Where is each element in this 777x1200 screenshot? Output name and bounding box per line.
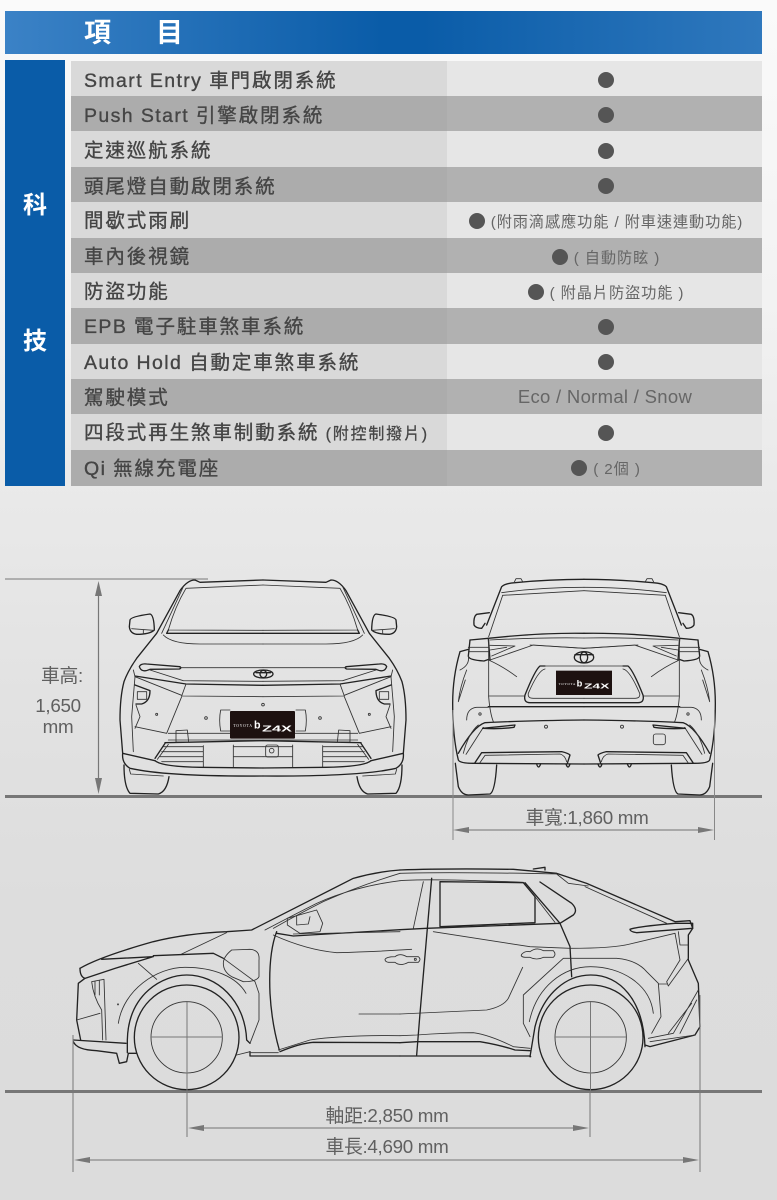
rear license plate: Z4X <box>584 682 611 691</box>
overall length dimension: 車長:4,690 mm <box>326 1136 448 1157</box>
wheelbase dimension: 軸距:2,850 mm <box>326 1105 448 1126</box>
feature row: wipers: (附雨滴感應功能 / 附車速連動功能) <box>491 214 743 231</box>
feature row: Push Start <box>71 96 762 131</box>
feature row: cruise control <box>71 131 762 167</box>
overall length dimension <box>73 995 700 1172</box>
feature row: wipers <box>71 202 762 238</box>
front license plate: TOYOTA <box>233 724 252 728</box>
feature row: drive modes: Eco / Normal / Snow <box>518 386 692 406</box>
front view of car <box>120 580 406 794</box>
sidebar character 技: 技 <box>23 328 47 355</box>
wheel centre crosshairs <box>151 1002 626 1092</box>
front license plate: b <box>254 720 261 732</box>
feature row: anti-theft <box>71 273 762 308</box>
rear fuel flap <box>653 734 665 745</box>
rear view of car <box>453 579 715 795</box>
feature row: rear-view mirror: 車內後視鏡 <box>84 246 191 268</box>
feature row: rear-view mirror <box>71 238 762 273</box>
height dimension: 1,650 <box>35 695 81 716</box>
front license plate <box>230 711 295 739</box>
feature row: Smart Entry: Smart Entry 車門啟閉系統 <box>84 70 338 92</box>
header title: 目 <box>156 18 183 48</box>
feature row: Smart Entry <box>71 61 762 96</box>
feature row: automatic lights: 頭尾燈自動啟閉系統 <box>84 176 277 198</box>
table header bar <box>5 11 762 54</box>
feature row: drive modes: 駕駛模式 <box>84 387 170 409</box>
feature row: drive modes <box>71 379 762 414</box>
feature row: EPB: EPB 電子駐車煞車系統 <box>84 316 305 338</box>
ground line: front and rear views <box>5 795 762 798</box>
ground line: side view <box>5 1090 762 1093</box>
side view of car <box>73 867 700 1090</box>
feature row: anti-theft: ( 附晶片防盜功能 ) <box>550 284 684 302</box>
feature row: wipers: 間歇式雨刷 <box>84 210 191 232</box>
wheelbase dimension <box>187 1092 590 1137</box>
width dimension: 車寬:1,860 mm <box>526 807 648 828</box>
feature row: rear-view mirror: ( 自動防眩 ) <box>574 250 660 266</box>
feature row: regenerative braking <box>71 414 614 450</box>
side view: front half <box>73 870 412 1090</box>
feature row: Push Start: Push Start 引擎啟閉系統 <box>84 105 324 127</box>
feature row: Auto Hold <box>71 344 762 379</box>
side view: rear half <box>385 867 700 1090</box>
feature row: Qi charger: Qi 無線充電座 <box>84 458 220 480</box>
rear license plate: b <box>577 679 583 689</box>
sidebar character 科: 科 <box>23 192 47 219</box>
feature row: regenerative braking: 四段式再生煞車制動系統 (附控制撥片) <box>84 422 429 444</box>
height dimension: 車高: <box>41 665 83 686</box>
feature row: cruise control: 定速巡航系統 <box>84 140 212 162</box>
feature row: EPB <box>71 308 762 344</box>
rear logo <box>574 652 594 663</box>
height dimension <box>5 579 208 794</box>
front camera <box>266 745 278 757</box>
feature row: anti-theft: 防盜功能 <box>84 281 170 303</box>
rear license plate: TOYOTA <box>559 682 576 686</box>
front license plate: Z4X <box>262 723 292 733</box>
category sidebar: 科技 <box>5 60 65 486</box>
height dimension: mm <box>43 716 73 737</box>
feature row: Auto Hold: Auto Hold 自動定車煞車系統 <box>84 352 360 374</box>
front logo <box>254 670 273 678</box>
rear license plate <box>556 671 612 695</box>
header title <box>84 18 183 48</box>
feature row: Qi charger: ( 2個 ) <box>593 461 641 478</box>
feature row: automatic lights <box>71 167 762 202</box>
header title: 項 <box>84 18 111 48</box>
width dimension <box>453 710 714 840</box>
feature row: Qi charger <box>71 450 762 486</box>
